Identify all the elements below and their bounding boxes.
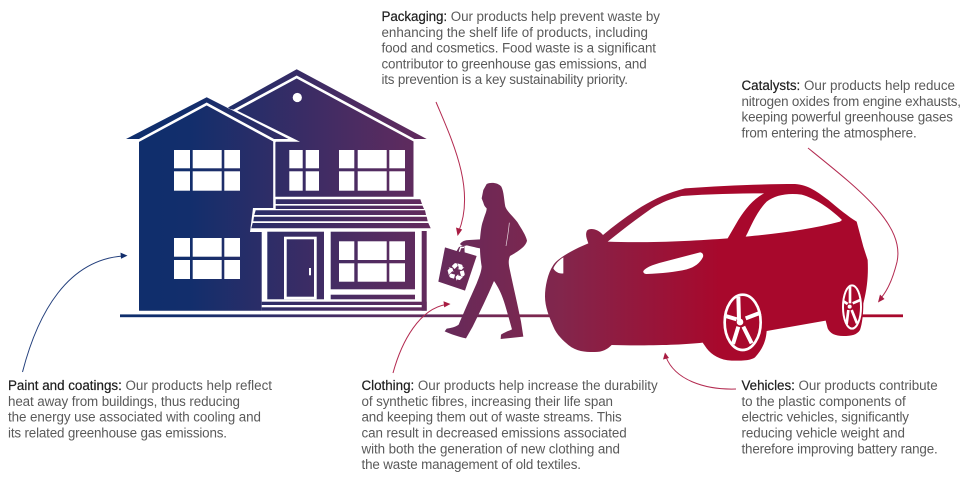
text: vehicles: to the plastic components of (742, 394, 906, 409)
text: vehicles: therefore improving battery range. (742, 441, 938, 456)
front wheel (725, 295, 761, 350)
rear wheel (843, 285, 861, 329)
text: paint and coatings: the energy use associated with cooling and (8, 410, 261, 425)
arrow: packaging (436, 102, 465, 236)
text: paint and coatings (8, 378, 272, 440)
text: catalysts (742, 78, 961, 140)
text: packaging: food and cosmetics. Food waste is a significant (382, 41, 656, 56)
text: packaging: enhancing the shelf life of products, including (382, 25, 648, 40)
icon: woman walking with recycling bag: ♻ (442, 256, 470, 289)
text: catalysts: keeping powerful greenhouse gases (742, 110, 953, 125)
arrow: vehicles (663, 352, 736, 389)
text: paint and coatings: Paint and coatings: Our products help reflect (8, 378, 272, 393)
ground line (120, 314, 903, 317)
icon: front door (284, 237, 317, 299)
text: clothing: the waste management of old textiles. (362, 457, 581, 472)
text: paint and coatings: its related greenhouse gas emissions. (8, 426, 227, 440)
text: packaging (382, 9, 660, 87)
text: paint and coatings: heat away from buildings, thus reducing (8, 394, 240, 409)
text: vehicles: reducing vehicle weight and (742, 426, 905, 440)
text: clothing: of synthetic fibres, increasing their life span (362, 394, 613, 409)
icon: woman walking with recycling bag (438, 183, 527, 339)
arrow: catalysts (808, 148, 898, 302)
icon: car (545, 184, 868, 361)
arrow: clothing (393, 301, 450, 373)
arrow: paint and coatings (22, 253, 128, 372)
text: catalysts: from entering the atmosphere. (742, 126, 917, 140)
text: catalysts: nitrogen oxides from engine exhausts, (742, 94, 961, 109)
windshield (608, 193, 764, 242)
text: vehicles: electric vehicles, significantly (742, 410, 909, 425)
text: clothing: and keeping them out of waste streams. This (362, 410, 622, 425)
headlight (553, 257, 563, 273)
text: catalysts: Catalysts: Our products help reduce (742, 78, 955, 93)
side window (746, 194, 842, 237)
text: clothing: can result in decreased emissions associated (362, 426, 627, 440)
windows (174, 150, 405, 282)
text: clothing: with both the generation of new clothing and (360, 441, 620, 456)
text: clothing: Clothing: Our products help increase the durability (362, 378, 658, 393)
icon: house (126, 69, 431, 311)
text: vehicles: Vehicles: Our products contribute (742, 378, 938, 393)
door crease (643, 252, 703, 274)
text: vehicles (742, 378, 938, 456)
text: packaging: its prevention is a key sustainability priority. (382, 72, 628, 87)
text: clothing (360, 378, 658, 472)
text: packaging: contributor to greenhouse gas emissions, and (382, 56, 647, 71)
text: packaging: Packaging: Our products help prevent waste by (382, 9, 660, 24)
